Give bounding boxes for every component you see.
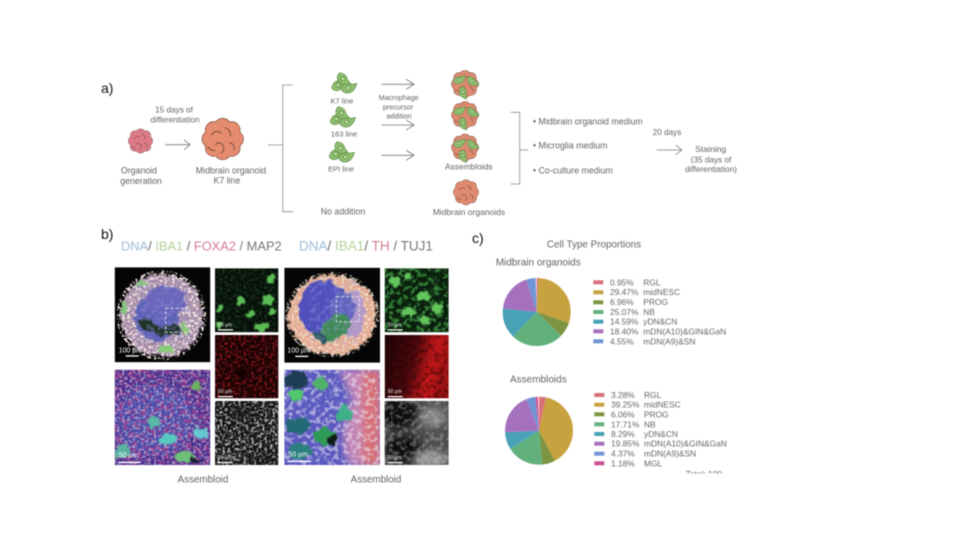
label b): b) (101, 226, 113, 242)
micrograph: whole assembloid FOXA2: 100 µm (119, 347, 142, 354)
list item: co-culture medium: • Co-culture medium (533, 165, 613, 175)
legend: assembloids: 1.18% (611, 458, 635, 468)
arrow: to staining (657, 145, 682, 155)
icon: K7 line cells (329, 70, 357, 94)
legend: midbrain organoids: 6.96% (610, 297, 634, 307)
pie chart: assembloids (522, 414, 556, 448)
legend: assembloids: mDN(A10)&GIN&GaN (644, 439, 727, 449)
micrograph: TH channel: 50 µm (388, 389, 402, 395)
icon: assembloid 1 (452, 71, 479, 99)
icon: 163 line cells (328, 104, 355, 128)
legend: midbrain organoids: PROG (643, 297, 668, 307)
micrograph: TH channel (384, 334, 450, 400)
legend: assembloids: 3.28% (611, 390, 635, 400)
legend: assembloids: 17.71% (611, 419, 640, 429)
icon: EPI line cells (327, 139, 354, 163)
text: staining time point: Staining (695, 144, 726, 154)
list: media conditions: • Midbrain organoid medium (533, 117, 643, 127)
legend: assembloids: mDN(A9)&SN (644, 449, 696, 459)
text: 163 line: 163 line (331, 130, 357, 139)
text: midbrain organoid K7 line: Midbrain organoid (196, 166, 266, 176)
micrograph: IBA1 channel (214, 268, 280, 334)
micrograph: TH zoomed merge: 50 µm (288, 452, 308, 459)
legend: assembloids: RGL (644, 390, 662, 400)
panel b: left stain title: DNA/ IBA1 / FOXA2 / MAP2 (121, 238, 282, 254)
micrograph: TH zoomed merge (284, 369, 381, 466)
legend: midbrain organoids: NB (643, 307, 655, 317)
micrograph: MAP2 channel (214, 400, 280, 466)
legend: assembloids: 4.37% (611, 449, 635, 459)
subtitle: assembloids: Assembloids (510, 374, 567, 386)
legend: midbrain organoids: RGL (643, 277, 661, 287)
micrograph: FOXA2 zoomed merge: 50 µm (119, 453, 138, 460)
legend: assembloids: 19.85% (611, 439, 640, 449)
text: EPI line: EPI line (328, 165, 354, 174)
micrograph: whole assembloid FOXA2 (114, 266, 211, 363)
legend: midbrain organoids: mDN(A9)&SN (643, 336, 695, 346)
legend: midbrain organoids: midNESC (643, 287, 680, 297)
text: macrophage precursor addition: Macrophage (379, 93, 419, 102)
icon: midbrain organoid control (454, 180, 478, 205)
text: macrophage precursor addition: precursor (383, 102, 414, 112)
icon: small organoid (128, 129, 153, 153)
text: 15 days of differentiation: 15 days of (155, 106, 194, 114)
text: 15 days of differentiation: differentiation (150, 116, 200, 124)
cropped total label: Total: 100 (686, 469, 722, 479)
micrograph: MAP2 channel: 50 µm (218, 455, 232, 461)
legend: midbrain organoids (593, 277, 726, 346)
text: organoid generation: Organoid (121, 166, 157, 176)
text: midbrain organoid K7 line: K7 line (214, 176, 241, 186)
pie chart: midbrain organoids (520, 295, 554, 329)
micrograph: IBA1 channel right (384, 268, 450, 334)
legend: midbrain organoids: yDN&CN (643, 317, 677, 327)
panel c: cell type proportions (472, 230, 727, 479)
icon: assembloid 3 (452, 134, 479, 163)
icon: midbrain organoid (202, 119, 243, 159)
legend: midbrain organoids: 29.47% (610, 287, 639, 297)
panel a: differentiation workflow (101, 70, 737, 217)
micrograph: IBA1 channel right: 50 µm (388, 322, 402, 328)
panel b: right stain title: DNA/ IBA1/ TH / TUJ1 (299, 238, 433, 254)
label c): c) (472, 230, 484, 246)
legend: midbrain organoids: 0.95% (610, 277, 634, 287)
page content (101, 70, 737, 486)
chart title: Cell Type Proportions (547, 240, 641, 250)
legend: midbrain organoids: 18.40% (610, 326, 639, 336)
legend: assembloids (594, 390, 727, 468)
micrograph: whole assembloid TH (284, 267, 381, 364)
text: staining time point: differentiation) (685, 165, 737, 174)
caption: right assembloid: Assembloid (351, 474, 401, 486)
text: 20 days: 20 days (653, 128, 681, 137)
legend: assembloids: midNESC (644, 400, 681, 410)
text: macrophage precursor addition: addition (386, 112, 412, 120)
text: organoid generation: generation (120, 176, 162, 186)
bracket: cell line branches (268, 85, 293, 212)
legend: assembloids: MGL (644, 458, 662, 468)
arrow: organoid to midbrain organoid (165, 140, 190, 150)
text: no addition: No addition (321, 207, 365, 217)
arrow: EPI line (382, 150, 414, 160)
legend: midbrain organoids: mDN(A10)&GIN&GaN (643, 326, 726, 336)
legend: assembloids: NB (644, 419, 656, 429)
legend: midbrain organoids: 4.55% (610, 336, 634, 346)
legend: assembloids: 8.29% (611, 429, 635, 439)
caption: left assembloid: Assembloid (178, 474, 228, 486)
legend: midbrain organoids: 14.59% (610, 317, 639, 327)
micrograph: FOXA2 channel (214, 334, 280, 400)
micrograph: FOXA2 zoomed merge (114, 369, 212, 466)
micrograph: whole assembloid TH: 100 µm (287, 348, 311, 355)
text: K7 line: K7 line (331, 96, 353, 105)
legend: assembloids: yDN&CN (644, 429, 678, 439)
legend: midbrain organoids: 25.07% (610, 307, 639, 317)
legend: assembloids: 6.06% (611, 409, 635, 419)
text: staining time point: (35 days of (691, 156, 732, 164)
icon: assembloid 2 (452, 102, 479, 130)
micrograph: FOXA2 channel: 50 µm (218, 389, 232, 395)
micrograph: TUJ1 channel (384, 400, 450, 466)
subtitle: midbrain organoids: Midbrain organoids (496, 258, 581, 268)
label a): a) (101, 80, 113, 96)
micrograph: IBA1 channel: 50 µm (218, 322, 232, 328)
arrow: K7 line (382, 79, 414, 89)
micrograph: TUJ1 channel: 50 µm (388, 455, 402, 461)
list item: microglia medium: • Microglia medium (533, 141, 607, 151)
arrow: 163 line (382, 120, 414, 130)
text: assembloids: Assembloids (445, 162, 492, 172)
legend: assembloids: 39.25% (611, 400, 640, 410)
text: midbrain organoids: Midbrain organoids (433, 207, 505, 217)
legend: assembloids: PROG (644, 409, 669, 419)
bracket: media conditions (511, 112, 528, 184)
